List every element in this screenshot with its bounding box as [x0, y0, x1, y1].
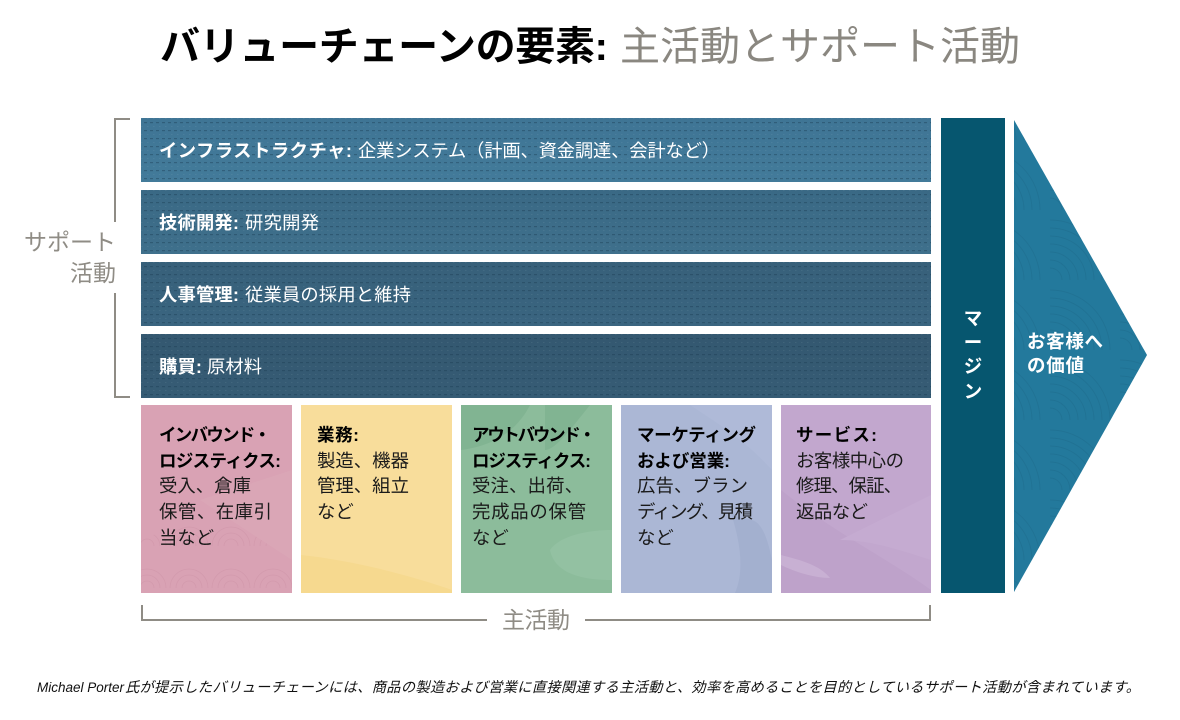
panel: service: サービス: [796, 425, 877, 445]
panel: margin: ン [964, 381, 982, 402]
panel: service [781, 405, 931, 593]
panel: procurement: 購買: [159, 356, 202, 377]
arrow: customer value: の価値 [1027, 355, 1084, 376]
panel: service: 返品など [796, 501, 868, 522]
label: primary activities: 主活動 [502, 607, 570, 633]
panel: infrastructure [141, 118, 931, 182]
panel: marketing and sales: ディング、見積 [637, 501, 753, 522]
panel: margin [941, 118, 1005, 593]
panel: infrastructure: 企業システム（計画、資金調達、会計など） [358, 140, 720, 161]
panel: outbound logistics: ロジスティクス: [472, 451, 591, 471]
panel: inbound logistics: 受入、倉庫 [159, 475, 251, 496]
title [160, 25, 1020, 69]
panel: operations: など [317, 501, 354, 522]
panel: inbound logistics: ロジスティクス: [159, 451, 281, 471]
bracket: primary activities [142, 605, 930, 633]
panel: human resources: 従業員の採用と維持 [245, 284, 411, 305]
panel: infrastructure: インフラストラクチャ: [159, 140, 352, 161]
panel: outbound logistics: 完成品の保管 [472, 501, 586, 522]
panel: procurement: 原材料 [207, 356, 262, 377]
panel: outbound logistics: アウトバウンド・ [472, 425, 596, 445]
panel: human resources: 人事管理: [159, 284, 239, 305]
panel: inbound logistics: 当など [159, 527, 214, 548]
bracket: support activities [24, 119, 130, 397]
panel: technology development [141, 190, 931, 254]
panel: marketing and sales [621, 405, 772, 593]
panel: procurement [141, 334, 931, 398]
panel: marketing and sales: および営業: [637, 451, 730, 471]
panel: inbound logistics [141, 405, 292, 593]
arrow: customer value [1014, 120, 1147, 592]
label: support activities: サポート [24, 229, 116, 255]
footnote: Michael Porter [37, 680, 125, 695]
panel: marketing and sales: マーケティング [637, 425, 756, 445]
panel: inbound logistics: インバウンド・ [159, 425, 271, 445]
panel: operations: 管理、組立 [317, 475, 409, 496]
panel: margin: ジ [964, 356, 982, 377]
panel: margin: ー [964, 332, 982, 353]
panel: outbound logistics: 受注、出荷、 [472, 475, 583, 496]
label: support activities: 活動 [70, 260, 116, 286]
panel: inbound logistics: 保管、在庫引 [159, 501, 272, 522]
panel: outbound logistics: など [472, 527, 509, 548]
panel: technology development: 研究開発 [245, 212, 319, 233]
panel: marketing and sales: 広告、ブラン [637, 475, 748, 496]
panel: technology development: 技術開発: [159, 212, 239, 233]
panel: service: お客様中心の [796, 450, 904, 471]
panel: service: 修理、保証、 [796, 475, 902, 496]
panel: human resources [141, 262, 931, 326]
title: 主活動とサポート活動 [620, 25, 1020, 69]
footnote: 氏が提示したバリューチェーンには、商品の製造および営業に直接関連する主活動と、効率を高めることを目的としているサポート活動が含まれています。 [125, 679, 1140, 696]
panel: operations: 業務: [317, 425, 359, 445]
arrow: customer value: お客様へ [1027, 331, 1103, 352]
panel: operations [301, 405, 452, 593]
panel: marketing and sales: など [637, 527, 674, 548]
panel: outbound logistics [461, 405, 612, 593]
panel: operations: 製造、機器 [317, 450, 409, 471]
panel: margin: マ [964, 308, 982, 329]
title: バリューチェーンの要素: [160, 25, 608, 69]
